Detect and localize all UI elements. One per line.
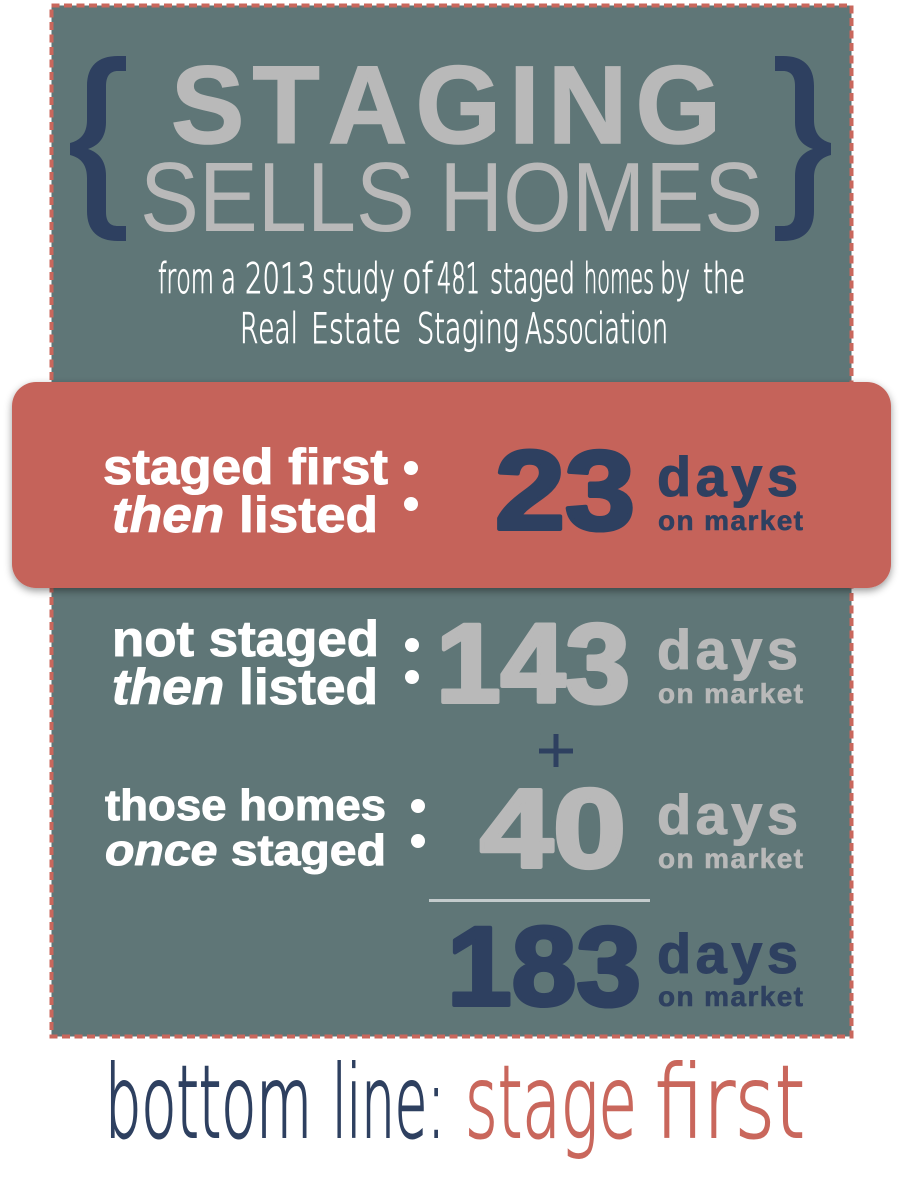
subtitle line 1: of	[402, 254, 433, 303]
label line 2: then listed	[112, 659, 378, 715]
colon dots	[404, 461, 418, 511]
unit: days: days	[657, 783, 798, 846]
subtitle	[158, 254, 745, 353]
icon: left brace	[70, 56, 126, 241]
unit: on market: on market	[658, 678, 803, 709]
label line 1: those homes	[105, 781, 386, 830]
label line 2: then listed	[112, 487, 378, 543]
icon: right brace	[775, 56, 831, 241]
subtitle line 1	[158, 254, 745, 303]
subtitle line 2	[240, 304, 668, 353]
conclusion part 2: stage	[465, 1044, 637, 1161]
row: not staged then listed	[112, 601, 803, 726]
colon dots	[405, 638, 419, 684]
unit: days: days	[657, 445, 798, 508]
conclusion part 2: first	[655, 1044, 805, 1161]
subtitle line 1: a	[221, 254, 236, 303]
heading: sells homes: SELLS HOMES	[140, 142, 763, 252]
colon dots	[411, 799, 425, 848]
sum line	[429, 899, 650, 902]
number: 143: 143	[436, 601, 630, 726]
unit: days: days	[657, 922, 798, 985]
subtitle line 1: the	[703, 254, 745, 303]
conclusion part 1: bottom	[105, 1044, 312, 1161]
number: 23 days: 23	[495, 428, 635, 553]
number: 40: 40	[480, 766, 626, 891]
unit: on market: on market	[658, 505, 803, 536]
label line 1: not staged	[112, 611, 379, 667]
row: those homes once staged	[105, 766, 803, 891]
subtitle line 1: staged	[490, 254, 575, 303]
subtitle line 2: Real	[240, 304, 298, 353]
unit: days: days	[657, 618, 798, 681]
subtitle line 1: from	[158, 254, 214, 303]
panel: background with dashed border	[52, 6, 852, 1036]
subtitle line 1: 2013	[245, 254, 315, 303]
subtitle line 1: 481	[437, 254, 480, 303]
label: staged first then listed	[103, 439, 388, 543]
unit: on market: on market	[658, 981, 803, 1012]
icon: plus sign	[539, 734, 573, 767]
subtitle line 1: homes	[584, 254, 654, 303]
row: total 183 days	[447, 904, 803, 1029]
subtitle line 1: by	[660, 254, 690, 303]
heading: staging: STAGING	[171, 44, 721, 167]
unit: on market: on market	[658, 843, 803, 874]
panel: staged first highlight card	[12, 382, 891, 588]
number: 183: 183	[447, 904, 641, 1029]
subtitle line 2: Staging	[417, 304, 519, 353]
subtitle line 2: Association	[525, 304, 668, 353]
title block	[70, 44, 831, 252]
card background	[12, 382, 891, 588]
label line 2: once staged	[105, 826, 386, 875]
subtitle line 2: Estate	[311, 304, 401, 353]
subtitle line 1: study	[322, 254, 395, 303]
label line 1: staged first	[103, 439, 388, 495]
conclusion part 1: line:	[332, 1044, 445, 1161]
conclusion: bottom line	[105, 1044, 805, 1161]
